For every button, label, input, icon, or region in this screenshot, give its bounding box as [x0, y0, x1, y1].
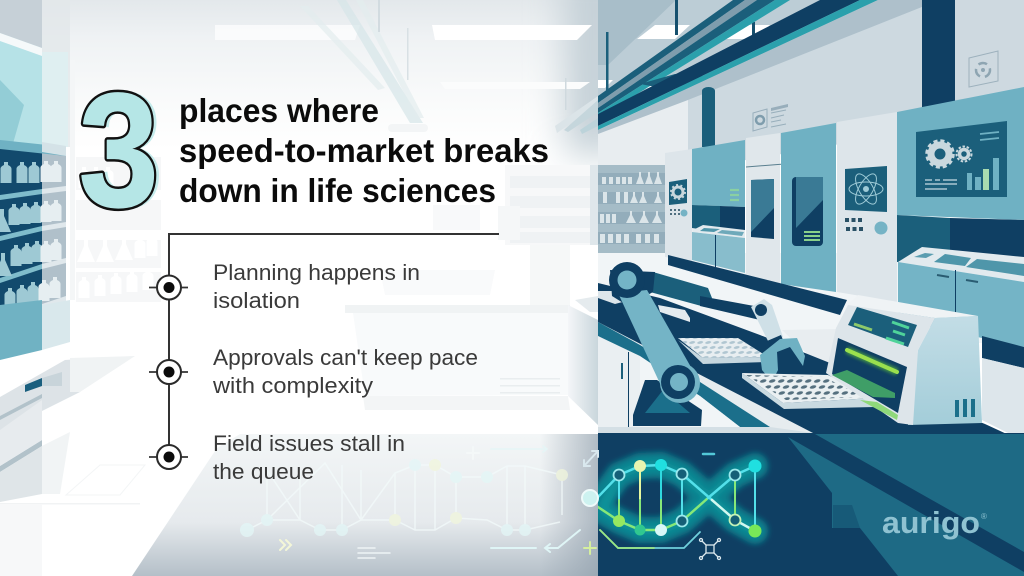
machine panel A	[665, 149, 692, 262]
big teal unit	[897, 87, 1024, 220]
faint DNA helix on left	[240, 459, 568, 537]
white column E with atom screen	[837, 112, 897, 302]
conveyor table	[598, 283, 1004, 433]
faded laboratory background	[0, 0, 625, 576]
far well plates	[598, 291, 768, 364]
faded floor gradient	[132, 434, 598, 576]
big unit data screen	[916, 121, 1007, 197]
list item: planning: Planning happens in	[213, 260, 420, 285]
DNA junction ring	[582, 490, 598, 506]
big unit counter and cabinets	[897, 215, 1024, 347]
wall	[688, 7, 922, 170]
navy column	[922, 0, 955, 110]
ducts	[598, 0, 878, 130]
glowing DNA helix	[598, 459, 762, 538]
left wall panels	[0, 0, 75, 300]
list item: field issues	[149, 431, 405, 484]
bottom platform	[788, 433, 1024, 576]
logo: aurigo	[882, 505, 980, 540]
analyser machine	[826, 295, 982, 425]
title: speed-to-market breaks	[179, 132, 549, 169]
list item: approvals: with complexity	[212, 373, 373, 398]
list item: approvals	[149, 345, 478, 398]
upper wall band	[598, 0, 922, 134]
back wall	[598, 100, 696, 232]
list item: planning	[149, 260, 420, 313]
faded far shelves	[505, 165, 598, 245]
list item: field issues: the queue	[213, 459, 314, 484]
left shelves with bottles	[0, 140, 66, 327]
left floor and strips	[0, 300, 250, 576]
ceiling and lights	[598, 0, 968, 100]
right wall	[955, 0, 1024, 100]
list item: field issues: Field issues stall in	[213, 431, 405, 456]
title: places where	[179, 92, 379, 129]
timeline connector	[169, 234, 499, 457]
front well plate	[742, 373, 875, 409]
logo: ®	[981, 512, 987, 521]
faded second shelf	[76, 157, 161, 302]
navy rails and white floor	[668, 255, 1024, 441]
wall signs	[753, 104, 788, 131]
faded bench and equipment	[345, 205, 598, 425]
title	[179, 92, 549, 209]
big numeral 3: 3	[82, 60, 162, 241]
title: down in life sciences	[179, 172, 496, 209]
large robot arm	[609, 262, 765, 426]
timeline node 2	[149, 360, 188, 384]
big numeral 3: 3	[79, 60, 159, 241]
small robot gripper	[751, 299, 805, 382]
white column C	[746, 133, 781, 283]
timeline node 1	[149, 276, 188, 300]
teal column D	[781, 123, 836, 292]
timeline node 3	[149, 445, 188, 469]
right colour laboratory scene	[598, 0, 1024, 576]
tech decoration icons	[280, 446, 720, 560]
biohazard sign	[969, 51, 998, 87]
list item: approvals: Approvals can't keep pace	[213, 345, 478, 370]
list item: planning: isolation	[213, 288, 300, 313]
big numeral 3: 3	[79, 60, 159, 241]
far shelves	[598, 165, 665, 253]
floor base	[598, 253, 1024, 343]
duct pillar	[702, 87, 715, 147]
machine cabinet B	[692, 140, 745, 273]
